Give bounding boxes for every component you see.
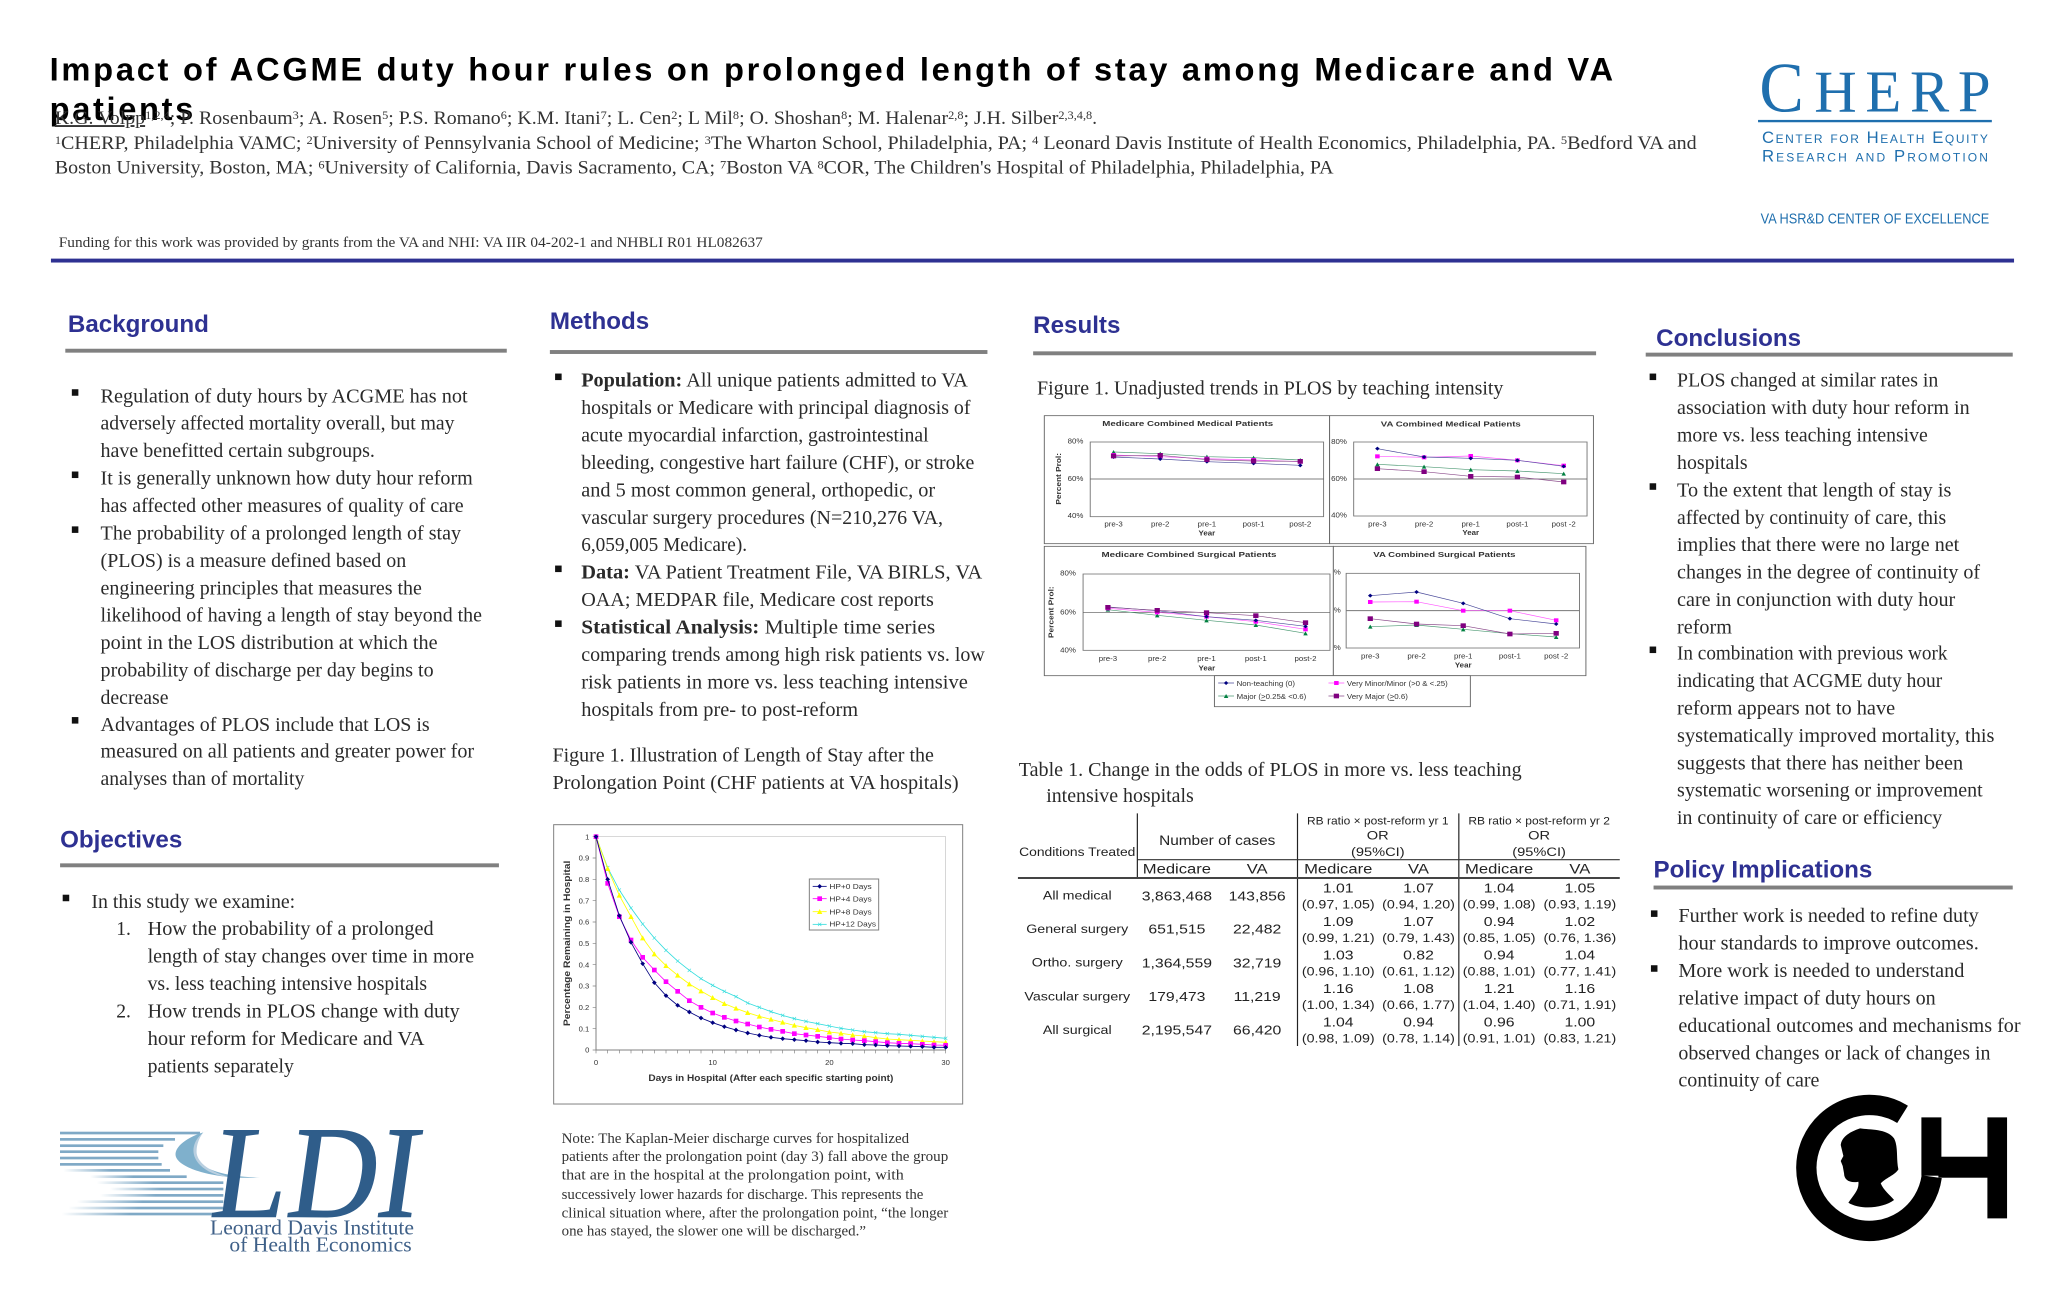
funding note: Funding for this work was provided by grants from the VA and NHI: VA IIR 04-202-1 and NHBLI R01 HL082637 [59,235,763,251]
background bullets: decrease [101,688,169,709]
chart: VA combined medical: 60% [1331,474,1347,483]
row: general surgery: 22,482 [1233,923,1281,937]
y axis labels [579,832,590,1055]
chart: Medicare combined surgical: pre-1 [1197,654,1216,663]
row: all surgical: 0.96 [1484,1016,1515,1030]
row: ortho surgery [1032,948,1616,978]
chart: Medicare combined surgical: pre-2 [1148,654,1166,663]
chart: VA combined medical: post -2 [1552,520,1576,528]
legend: HP+4 Days [829,894,872,903]
background bullets: measured on all patients and greater power for [101,742,475,763]
line chart: length of stay curves [554,825,963,1104]
chart: Medicare combined medical: post-1 [1243,520,1265,528]
figure 1 caption [552,745,959,794]
row: ortho surgery: 0.82 [1403,948,1434,963]
background bullets [72,386,482,790]
conclusions bullets: affected by continuity of care, this [1677,508,1946,529]
figure 1 caption: Figure 1. Illustration of Length of Stay after the [552,745,934,766]
row: general surgery: (0.79, 1.43) [1382,931,1455,945]
methods bullets: OAA; MEDPAR file, Medicare cost reports [581,590,934,611]
legend: HP+8 Days [829,907,872,916]
row: all medical: 1.05 [1564,881,1595,896]
row: ortho surgery: 1.03 [1323,948,1354,963]
row: all medical [1043,881,1616,911]
chart: VA combined surgical: post -2 [1544,652,1568,660]
table header: RB ratio × post-reform yr 1 [1307,815,1449,827]
chart: Medicare combined medical: 60% [1068,474,1084,483]
policy bullets: continuity of care [1678,1071,1820,1092]
chart: Medicare combined medical: Percent Prol: [1056,453,1063,505]
policy bullets: educational outcomes and mechanisms for [1678,1016,2021,1037]
table header: RB ratio × post-reform yr 2 [1468,815,1610,827]
table caption: intensive hospitals [1046,786,1194,807]
background bullets: point in the LOS distribution at which the [101,633,438,654]
y axis labels: 1 [585,832,589,841]
y axis labels: 0.5 [579,939,589,948]
row: vascular surgery: 179,473 [1148,990,1205,1005]
row: all medical: (0.94, 1.20) [1382,897,1455,911]
logo: LDI: LDI [204,1099,432,1246]
row: all surgical: 66,420 [1233,1024,1281,1038]
background bullets: Advantages of PLOS include that LOS is [101,715,430,736]
figure note: Note: The Kaplan-Meier discharge curves for hospitalized [562,1131,910,1147]
table header: Medicare [1465,862,1533,877]
conclusions bullets: In combination with previous work [1677,644,1948,665]
title: Impact of ACGME duty hour rules on prolonged length of stay among Medicare and VA [50,50,1613,87]
heading: methods: Methods [550,308,649,335]
authors and affiliations [55,108,1697,179]
table caption: Table 1. Change in the odds of PLOS in more vs. less teaching [1019,760,1522,781]
methods bullets: Statistical Analysis: Multiple time series [581,617,935,638]
chart: Medicare combined surgical: Medicare Combined Surgical Patients [1102,550,1277,559]
row: general surgery: 1.09 [1323,915,1354,930]
legend [809,879,879,930]
figure note [562,1131,948,1240]
row: all medical: (0.99, 1.08) [1463,897,1536,911]
conclusions bullets: hospitals [1677,453,1748,474]
shared chart legend: Very Major (>0.6) [1347,692,1408,701]
chart: Medicare combined surgical: 80% [1060,569,1076,578]
chart: Medicare combined surgical: post-1 [1245,654,1267,663]
background bullets: adversely affected mortality overall, but may [101,414,455,435]
heading: results: Results [1033,312,1120,339]
chart: Medicare combined surgical: 40% [1060,646,1076,654]
chart: VA combined surgical: pre-2 [1407,652,1426,660]
methods bullets [555,371,986,721]
title [50,50,1613,127]
row: vascular surgery [1024,982,1616,1012]
objectives list: 1. [116,919,131,940]
conclusions bullets: reform [1677,617,1732,638]
objectives list: How trends in PLOS change with duty [148,1001,460,1022]
x axis title: Days in Hospital (After each specific starting point) [648,1073,893,1083]
chart: VA combined surgical: VA Combined Surgical Patients [1373,550,1516,559]
x axis labels [594,1058,950,1067]
chart: Medicare combined medical: 40% [1068,511,1084,520]
table caption [1019,760,1522,807]
background bullets: engineering principles that measures the [101,578,422,599]
row: general surgery: 0.94 [1484,915,1515,930]
row: all medical: (0.97, 1.05) [1302,897,1375,911]
conclusions bullets: indicating that ACGME duty hour [1677,671,1943,692]
x axis labels: 20 [825,1058,834,1067]
table header: VA [1247,862,1268,877]
chart: Medicare combined surgical: Percent Prol: [1048,586,1056,638]
chart: Medicare combined surgical: 60% [1060,608,1076,616]
panel: policy implications [1651,857,2021,1092]
table header: Medicare [1143,862,1211,877]
legend: HP+0 Days [829,882,872,891]
y axis labels: 0 [585,1046,589,1055]
conclusions bullets: suggests that there has neither been [1677,753,1963,774]
row: ortho surgery: 1,364,559 [1142,956,1212,971]
row: general surgery: (0.76, 1.36) [1543,931,1616,945]
logo: CHERP: HERP [1814,60,1991,125]
objectives list: vs. less teaching intensive hospitals [148,974,427,995]
y axis labels: 0.9 [579,854,589,863]
shared chart legend [1214,676,1470,707]
background bullets: have benefitted certain subgroups. [101,441,375,462]
chart: VA combined medical: 40% [1331,511,1347,519]
row: all medical: (0.93, 1.19) [1543,897,1616,911]
chart: Medicare combined surgical: Year [1199,664,1215,673]
heading: objectives: Objectives [60,827,182,854]
logo: CHERP: C [1759,50,1804,128]
conclusions bullets: implies that there were no large net [1677,535,1960,556]
objectives list: How the probability of a prolonged [148,919,434,940]
heading: background: Background [68,311,209,338]
chart: VA combined medical: pre-3 [1368,520,1387,528]
row: general surgery: 1.02 [1564,915,1595,930]
series: HP+0 days [596,837,946,1047]
authors and affiliations: K.G. Volpp 1,2,4; P. Rosenbaum 3; A. Rosen 5; P.S. Romano 6; K.M. Itani 7; L. Cen 2; L Mil8; O. Shoshan 8; M. Halenar 2,8; J.H. Silber 2,3,4,8. [55,108,1097,129]
y axis title: Percentage Remaining in Hospital [562,861,572,1026]
chart: VA combined surgical: post-1 [1499,652,1521,660]
conclusions bullets: PLOS changed at similar rates in [1677,371,1938,392]
background bullets: The probability of a prolonged length of stay [101,523,461,544]
chart: VA combined medical [1330,416,1593,544]
table header: Number of cases [1159,833,1276,849]
chart: VA combined medical: 80% [1331,437,1347,446]
row: all surgical: (0.91, 1.01) [1463,1032,1536,1045]
chart: VA combined surgical: % [1334,643,1341,652]
row: general surgery [1026,915,1616,945]
table header: OR [1528,829,1550,842]
row: general surgery: 651,515 [1148,923,1205,937]
logo: LDI: Leonard Davis Institute [210,1217,414,1239]
chart: Medicare combined surgical [1044,546,1333,676]
row: all medical: 1.07 [1403,881,1434,896]
chart: VA combined surgical [1333,546,1586,676]
figure caption: trends: Figure 1. Unadjusted trends in PLOS by teaching intensity [1037,378,1504,399]
background bullets: analyses than of mortality [101,769,305,790]
methods bullets: risk patients in more vs. less teaching intensive [581,672,968,693]
row: ortho surgery: (0.96, 1.10) [1302,964,1375,978]
authors and affiliations: 1CHERP, Philadelphia VAMC; 2University of Pennsylvania School of Medicine; 3The Wharton School, Philadelphia, PA; 4 Leonard Davis Institute of Health Economics, Philadelphia, PA. 5Bedford VA and [55,133,1697,154]
figure note: successively lower hazards for discharge. This represents the [562,1187,924,1203]
policy bullets: relative impact of duty hours on [1678,988,1936,1009]
chart: VA combined surgical: pre-3 [1361,652,1379,660]
methods bullets: vascular surgery procedures (N=210,276 VA, [581,508,943,529]
logo: CHERP: VA HSR&D CENTER OF EXCELLENCE [1761,210,1989,227]
panel: conclusions [1646,325,2013,829]
policy bullets: hour standards to improve outcomes. [1678,934,1979,955]
figure note: patients after the prolongation point (day 3) fall above the group [562,1149,948,1165]
table: change in odds of PLOS [1018,813,1620,1046]
panel: results [1018,312,1620,1046]
y axis labels: 0.3 [579,982,589,991]
series: HP+4 days [596,837,946,1045]
conclusions bullets: changes in the degree of continuity of [1677,563,1981,584]
row: all surgical: 1.04 [1323,1016,1354,1030]
row: all medical: 1.04 [1484,881,1515,896]
y axis labels: 0.8 [579,875,589,884]
logo: LDI: of Health Economics [229,1235,412,1257]
row: ortho surgery: (0.88, 1.01) [1463,964,1536,978]
row: ortho surgery: (0.61, 1.12) [1382,964,1455,978]
chart: VA combined surgical: pre-1 [1454,652,1472,660]
background bullets: has affected other measures of quality of care [101,496,464,517]
row: all surgical [1043,1016,1616,1045]
conclusions bullets: in continuity of care or efficiency [1677,808,1942,829]
policy bullets: Further work is needed to refine duty [1678,906,1979,927]
logo: CHERP: Center for Health Equity [1762,128,1988,147]
row: general surgery: (0.99, 1.21) [1302,931,1375,945]
methods bullets: bleeding, congestive hart failure (CHF), or stroke [581,453,975,474]
methods bullets: Population: All unique patients admitted to VA [581,371,968,392]
conclusions bullets: association with duty hour reform in [1677,398,1970,419]
objectives list [63,892,474,1077]
logo: CHERP: Research and Promotion [1762,147,1988,166]
x axis labels: 30 [941,1058,950,1067]
row: all medical: 3,863,468 [1142,889,1212,904]
chart: Medicare combined medical: post-2 [1289,520,1311,528]
chart: Medicare combined surgical: pre-3 [1099,654,1117,663]
row: all medical: 1.01 [1323,881,1354,896]
row: general surgery: (0.85, 1.05) [1463,931,1536,945]
conclusions bullets: To the extent that length of stay is [1677,480,1951,501]
chart: VA combined surgical: % [1334,606,1341,615]
y axis labels: 0.4 [579,960,590,969]
background bullets: probability of discharge per day begins to [101,661,434,682]
row: vascular surgery: (0.71, 1.91) [1543,998,1616,1012]
row: vascular surgery: Vascular surgery [1024,989,1131,1003]
chart: Medicare combined medical: 80% [1068,437,1084,446]
panel: methods [550,308,987,1240]
row: all surgical: 1.00 [1564,1016,1595,1030]
table header: (95%CI) [1351,845,1405,859]
series: HP+8 days [596,837,946,1042]
figure note: clinical situation where, after the prolongation point, “the longer [562,1205,948,1221]
row: all surgical: (0.98, 1.09) [1302,1032,1375,1045]
shared chart legend: Non-teaching (0) [1237,679,1295,688]
title: patients [50,90,193,127]
chart: Medicare combined surgical: post-2 [1295,654,1316,663]
table header: VA [1569,862,1591,877]
row: all surgical: (0.78, 1.14) [1382,1032,1455,1045]
chart: VA combined medical: VA Combined Medical Patients [1381,420,1521,428]
row: ortho surgery: (0.77, 1.41) [1543,964,1616,978]
row: all surgical: (0.83, 1.21) [1543,1032,1616,1045]
chart: VA combined medical: pre-1 [1462,520,1480,528]
conclusions bullets: systematically improved mortality, this [1677,726,1994,747]
row: vascular surgery: 1.08 [1403,982,1434,997]
chart: Medicare combined medical: Medicare Combined Medical Patients [1102,419,1273,428]
policy bullets: More work is needed to understand [1678,961,1965,982]
background bullets: It is generally unknown how duty hour reform [101,469,473,490]
chart: Medicare combined medical [1044,416,1330,544]
legend: HP+12 Days [829,920,876,929]
chart: Medicare combined medical: Year [1199,529,1215,538]
figure note: that are in the hospital at the prolongation point, with [562,1167,904,1183]
background bullets: likelihood of having a length of stay beyond the [101,606,482,627]
x axis labels: 0 [594,1058,598,1067]
table header: OR [1367,829,1389,842]
chart: Medicare combined medical: pre-1 [1198,520,1216,528]
row: general surgery: 1.07 [1403,915,1434,930]
background bullets: (PLOS) is a measure defined based on [101,551,406,572]
table header [1019,815,1610,877]
objectives list: 2. [116,1001,131,1022]
methods bullets: and 5 most common general, orthopedic, or [581,480,936,501]
chart: VA combined medical: pre-2 [1415,520,1433,528]
objectives list: patients separately [148,1056,294,1077]
series: HP+12 days [596,837,946,1038]
y axis labels: 0.2 [579,1003,589,1012]
row: vascular surgery: (0.66, 1.77) [1382,998,1455,1012]
authors and affiliations: Boston University, Boston, MA; 6University of California, Davis Sacramento, CA; 7Boston VA 8COR, The Children's Hospital of Philadelphia, Philadelphia, PA [55,158,1334,179]
y axis labels: 0.1 [579,1024,589,1033]
objectives list: In this study we examine: [91,892,295,913]
chart: Medicare combined medical: pre-2 [1151,520,1169,528]
row: vascular surgery: 1.16 [1323,982,1354,997]
table header: Medicare [1304,862,1372,877]
row: vascular surgery: 11,219 [1234,990,1281,1005]
row: all surgical: 0.94 [1403,1016,1434,1030]
chart group: unadjusted PLOS trends [1044,416,1593,707]
figure 1 caption: Prolongation Point (CHF patients at VA hospitals) [552,773,959,794]
logo: LDI [60,1099,432,1257]
row: all medical: 143,856 [1229,889,1286,904]
y axis labels: 0.6 [579,918,589,927]
methods bullets: hospitals or Medicare with principal diagnosis of [581,398,971,419]
row: vascular surgery: (1.04, 1.40) [1463,998,1536,1012]
conclusions bullets: reform appears not to have [1677,698,1895,719]
chart: VA combined medical: Year [1462,528,1479,537]
methods bullets: comparing trends among high risk patients vs. low [581,645,986,666]
row: ortho surgery: Ortho. surgery [1032,956,1123,969]
row: ortho surgery: 32,719 [1233,956,1281,971]
chart: VA combined medical: post-1 [1506,520,1528,528]
policy bullets: observed changes or lack of changes in [1678,1043,1991,1064]
chart: VA combined surgical: % [1334,568,1341,577]
row: all medical: All medical [1043,888,1112,902]
row: vascular surgery: 1.16 [1564,982,1595,997]
row: vascular surgery: (1.00, 1.34) [1302,998,1375,1012]
methods bullets: acute myocardial infarction, gastrointestinal [581,425,929,446]
background bullets: Regulation of duty hours by ACGME has not [101,386,468,407]
row: ortho surgery: 1.04 [1564,948,1595,963]
row: all surgical: 2,195,547 [1142,1024,1212,1038]
conclusions bullets: care in conjunction with duty hour [1677,590,1956,611]
objectives list: hour reform for Medicare and VA [148,1029,424,1050]
heading: policy implications: Policy Implications [1654,857,1872,884]
methods bullets: Data: VA Patient Treatment File, VA BIRLS, VA [581,563,982,584]
table header: (95%CI) [1512,845,1566,859]
row: vascular surgery: 1.21 [1484,982,1515,997]
row: ortho surgery: 0.94 [1484,948,1515,963]
table header: VA [1408,862,1430,877]
table header: Conditions Treated [1019,845,1135,859]
panel: objectives [60,827,499,1077]
chart: VA combined surgical: Year [1455,661,1472,670]
conclusions bullets: more vs. less teaching intensive [1677,425,1928,446]
chart: Medicare combined medical: pre-3 [1104,520,1123,528]
policy bullets [1651,906,2021,1092]
shared chart legend: Very Minor/Minor (>0 & <.25) [1347,679,1448,688]
heading: conclusions: Conclusions [1656,325,1801,352]
objectives list: length of stay changes over time in more [148,947,474,968]
row: all surgical: All surgical [1043,1023,1112,1037]
methods bullets: hospitals from pre- to post-reform [581,700,858,721]
methods bullets: 6,059,005 Medicare). [581,535,747,556]
conclusions bullets: systematic worsening or improvement [1677,781,1983,802]
logo: CHERP [1758,50,1992,227]
logo: Children's Hospital [1806,1105,2007,1231]
x axis labels: 10 [708,1058,717,1067]
row: general surgery: General surgery [1026,922,1129,936]
figure note: one has stayed, the slower one will be discharged.” [562,1224,866,1240]
y axis labels: 0.7 [579,896,589,905]
panel: background [65,311,507,790]
conclusions bullets [1650,371,1994,829]
shared chart legend: Major (>0.25& <0.6) [1237,692,1307,701]
